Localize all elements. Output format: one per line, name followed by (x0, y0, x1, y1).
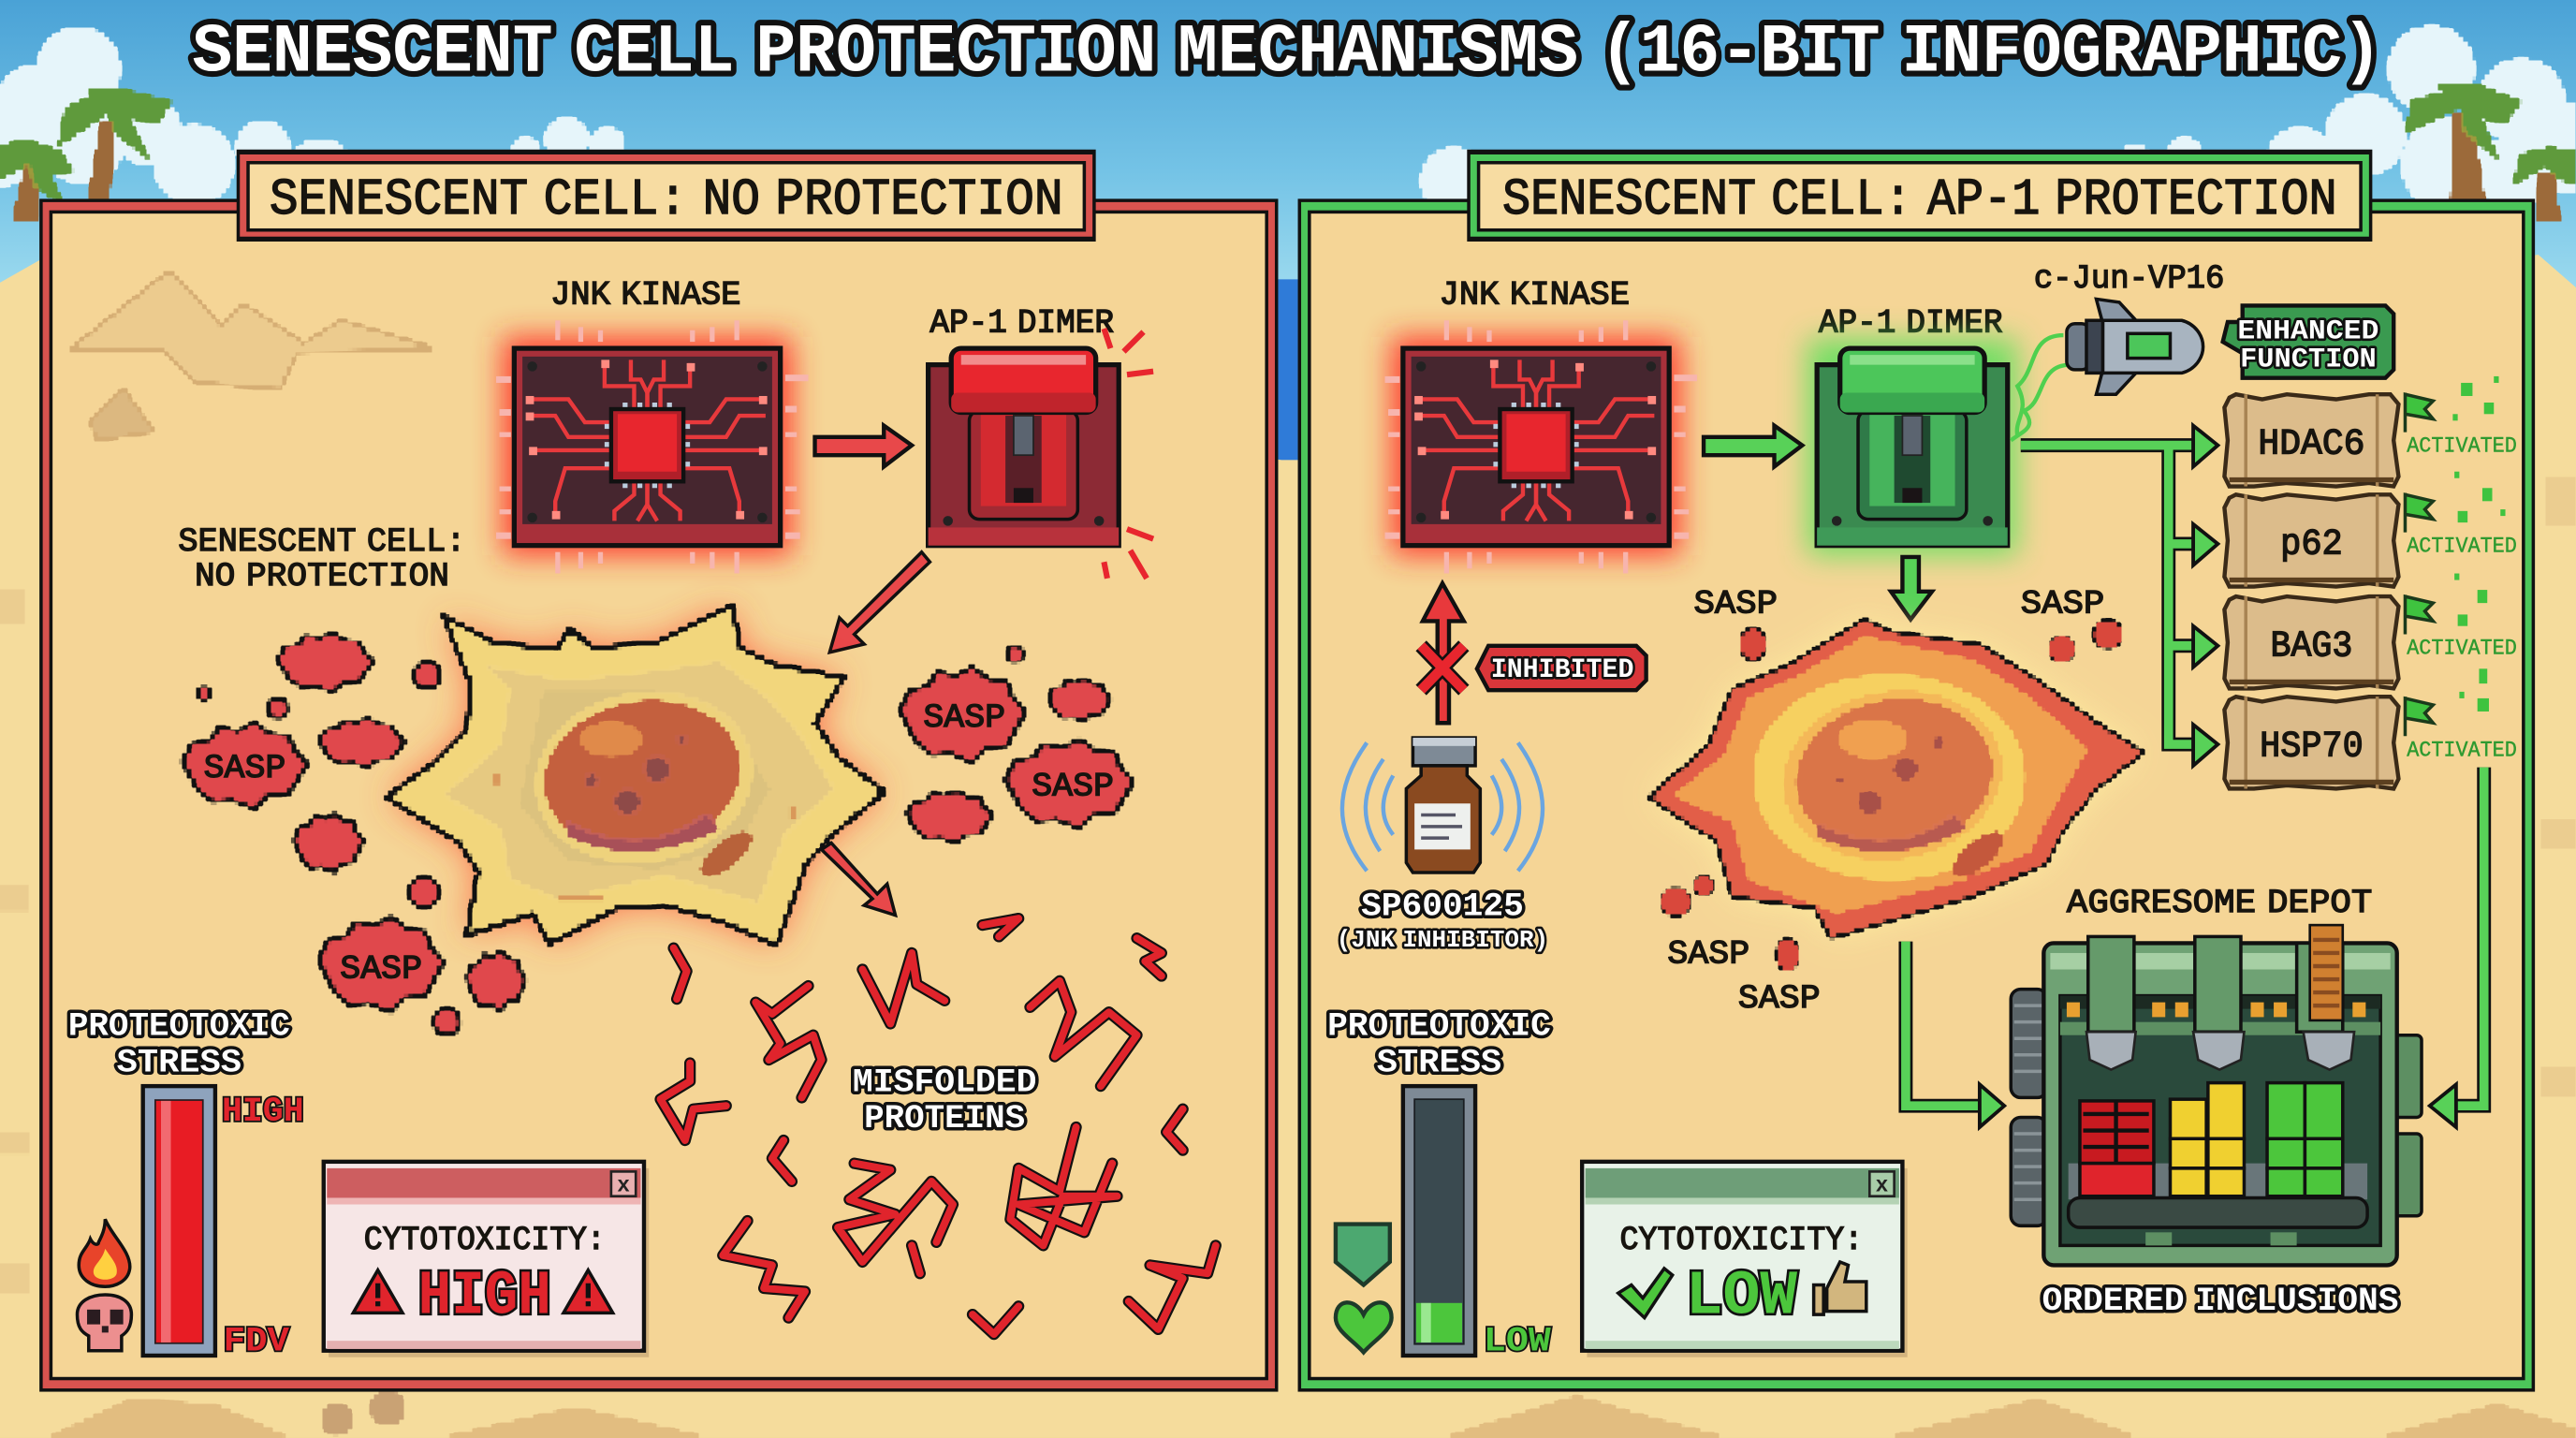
icon: red sparks (1104, 329, 1153, 579)
arrow: AP-1 to cell (1891, 557, 1932, 620)
callout: cytotoxicity low window: x (1876, 1173, 1889, 1197)
scroll: BAG3: BAG3 (2271, 625, 2352, 667)
meter label: low: FDV (224, 1323, 290, 1362)
icon: shield (1336, 1225, 1390, 1284)
inhibition arrow (1421, 583, 1464, 723)
label: senescent cell: NO PROTECTION (195, 558, 449, 595)
stress meter: high (143, 1086, 215, 1356)
heading: AP-1 protection (1467, 150, 2372, 242)
SASP labels: SASP (923, 699, 1005, 737)
arrow: AP-1 to chaperones (2021, 426, 2217, 766)
label: ordered inclusions: ORDERED INCLUSIONS (2042, 1283, 2398, 1320)
panel: AP-1 protection (1298, 150, 2535, 1392)
label: SP600125 JNK inhibitor: (JNK INHIBITOR) (1337, 926, 1548, 954)
SASP blobs (184, 634, 1132, 1034)
scroll: HSP70: HSP70 (2260, 726, 2364, 767)
arrow: cell to misfolded proteins (822, 843, 896, 916)
label: proteotoxic stress: PROTEOTOXIC (1327, 1008, 1551, 1046)
icon: aggresome depot machine (2011, 925, 2422, 1265)
callout: cytotoxicity high window: HIGH (418, 1261, 551, 1332)
arrow: JNK to AP-1 (815, 426, 912, 466)
toggle glow (1808, 339, 2017, 555)
SASP labels: SASP (2021, 586, 2104, 624)
activated flags and labels: ACTIVATED (2407, 738, 2517, 762)
misfolded protein squiggles (661, 918, 1216, 1334)
arrow: cell to depot (1906, 942, 2004, 1127)
bottom dunes (50, 1392, 2576, 1438)
icon: heart (1336, 1302, 1392, 1352)
heading: no protection: SENESCENT CELL: NO PROTECTION (270, 172, 1063, 229)
SASP labels: SASP (1738, 980, 1821, 1018)
scroll: BAG3 (2224, 596, 2398, 688)
label: proteotoxic stress: STRESS (117, 1044, 242, 1081)
callout: cytotoxicity low window: CYTOTOXICITY: (1620, 1222, 1863, 1259)
badge: enhanced function: FUNCTION (2240, 343, 2377, 374)
icon: skull (77, 1295, 131, 1351)
label: proteotoxic stress (68, 1008, 290, 1081)
label: misfolded proteins: MISFOLDED (853, 1064, 1036, 1101)
callout: cytotoxicity high window: CYTOTOXICITY: (364, 1222, 606, 1259)
label: SP600125 JNK inhibitor (1337, 888, 1548, 954)
label: AP-1 dimer: AP-1 DIMER (1819, 305, 2002, 343)
scroll: HDAC6: HDAC6 (2258, 423, 2364, 464)
meter label: high: HIGH (222, 1093, 304, 1132)
icon: flame (79, 1219, 130, 1286)
palm trees (0, 85, 2576, 222)
label: senescent cell: SENESCENT CELL: (178, 523, 466, 561)
SASP labels: SASP (1032, 768, 1114, 805)
cell glow (389, 608, 882, 943)
label: JNK kinase: JNK KINASE (550, 277, 741, 315)
clouds (0, 26, 2576, 217)
icon: SP600125 vial with waves (1342, 738, 1543, 873)
faint desert pyramids (74, 272, 431, 439)
scroll: p62 (2224, 494, 2398, 587)
label: SP600125 JNK inhibitor: SP600125 (1361, 888, 1524, 926)
scroll: HSP70 (2224, 697, 2398, 788)
badge: inhibited (1477, 646, 1647, 690)
icon: JNK chip (496, 320, 809, 574)
side sand specks (0, 477, 2576, 1292)
callout: cytotoxicity low window: LOW (1686, 1261, 1797, 1332)
ocean strip (1278, 279, 1298, 460)
activated flags and labels: ACTIVATED (2407, 535, 2517, 559)
scroll: p62: p62 (2280, 523, 2343, 565)
callout: cytotoxicity high window (324, 1162, 649, 1357)
label: proteotoxic stress (1327, 1008, 1551, 1081)
icon: rocket injector (2067, 299, 2203, 394)
green wavy beams (2011, 335, 2070, 440)
panel: no protection (39, 150, 1278, 1392)
label: misfolded proteins (853, 1064, 1036, 1137)
label: senescent cell (178, 523, 466, 595)
SASP labels: SASP (340, 950, 422, 988)
activated flags and labels (2405, 376, 2517, 762)
icon: senescent cell with spiky membrane (389, 608, 882, 943)
label: c-Jun-VP16: c-Jun-VP16 (2034, 260, 2224, 298)
cell glow (1651, 621, 2141, 936)
SASP labels: SASP (1667, 935, 1749, 973)
label: proteotoxic stress: PROTEOTOXIC (68, 1008, 290, 1046)
SASP labels: SASP (204, 750, 285, 787)
arrow: chaperones to depot (2430, 768, 2484, 1127)
SASP droplets (1662, 621, 2121, 970)
label: misfolded proteins: PROTEINS (864, 1100, 1025, 1137)
SASP labels: SASP (1694, 586, 1778, 624)
activated flags and labels: ACTIVATED (2407, 637, 2517, 661)
stress meter: low (1403, 1086, 1475, 1356)
arrow: JNK to AP-1 (1704, 426, 1802, 466)
activated flags and labels: ACTIVATED (2407, 434, 2517, 459)
icon: JNK chip (1385, 320, 1697, 574)
icon: protected cell (1651, 621, 2141, 936)
heading: AP-1 protection: SENESCENT CELL: AP-1 PROTECTION (1502, 172, 2337, 229)
label: AP-1 dimer: AP-1 DIMER (929, 305, 1114, 343)
heading: no protection (237, 150, 1096, 242)
badge: inhibited: INHIBITED (1491, 653, 1633, 685)
icon: red AP-1 toggle (929, 348, 1119, 546)
callout: cytotoxicity high window: x (617, 1173, 630, 1197)
title: SENESCENT CELL PROTECTION MECHANISMS (16-BIT INFOGRAPHIC) (192, 14, 2382, 92)
label: proteotoxic stress: STRESS (1377, 1044, 1501, 1081)
meter label: low: LOW (1484, 1323, 1552, 1362)
scroll: HDAC6 (2224, 394, 2398, 487)
label: aggresome depot: AGGRESOME DEPOT (2067, 885, 2372, 922)
badge: enhanced function: ENHANCED (2237, 315, 2378, 347)
icon: green AP-1 toggle (1817, 348, 2008, 546)
SASP labels (1667, 586, 2104, 1018)
arrow: AP-1 to cell (829, 552, 929, 653)
badge: enhanced function (2223, 305, 2393, 378)
SASP labels (204, 699, 1114, 988)
label: JNK kinase: JNK KINASE (1439, 277, 1630, 315)
callout: cytotoxicity low window (1582, 1162, 1908, 1357)
